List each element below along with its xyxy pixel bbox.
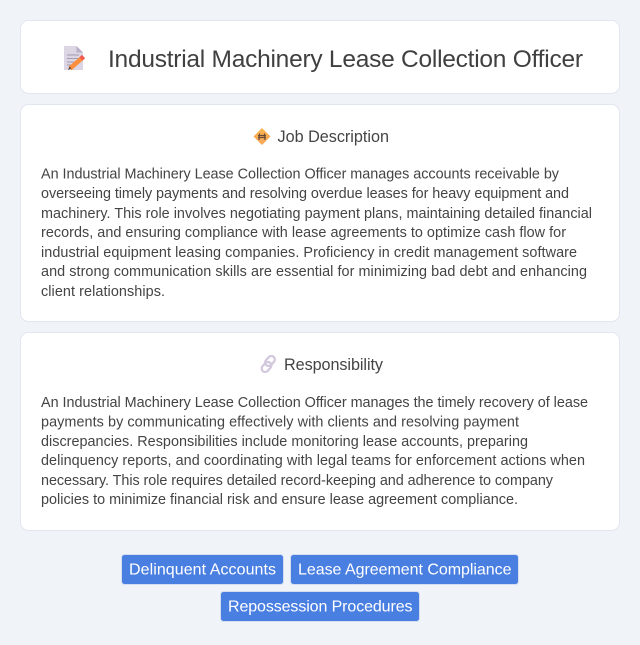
text block: job description: An Industrial Machinery Lease Collection Officer manages accounts receivable by [41, 166, 560, 182]
tag: repossession procedures [220, 592, 420, 622]
text block: responsibility [41, 395, 588, 508]
text block: job description: machinery. This role involves negotiating payment plans, maintaining detailed financial [41, 206, 592, 222]
panel: responsibility [20, 332, 620, 530]
title: Industrial Machinery Lease Collection Officer [108, 46, 583, 73]
tag: delinquent accounts: Delinquent Accounts [129, 562, 276, 578]
heading: responsibility: Responsibility [284, 356, 384, 374]
icon: document with pencil [64, 46, 84, 70]
panel: header [20, 20, 620, 94]
tag: delinquent accounts [122, 554, 284, 584]
tag: lease agreement compliance: Lease Agreement Compliance [298, 562, 512, 578]
text block: responsibility: necessary. This role requires detailed record-keeping and adherence to company [41, 473, 554, 489]
heading: job description: Job Description [278, 128, 389, 146]
text block: job description: client relationships. [41, 284, 165, 300]
text block: responsibility: policies to minimize financial risk and ensure lease agreement compliance. [41, 492, 518, 508]
text block: responsibility: payments by communicating effectively with clients and resolving payment [41, 414, 519, 430]
text block: job description: records, and ensuring compliance with lease agreements to optimize cash flow for [41, 225, 566, 241]
tag: repossession procedures: Repossession Procedures [228, 598, 412, 616]
text block: job description [41, 166, 592, 300]
panel: job description [20, 104, 620, 322]
icon: construction diamond [254, 128, 270, 145]
icon: chain link [260, 355, 276, 373]
text block: job description: industrial equipment leasing companies. Proficiency in credit management software [41, 245, 577, 261]
text block: responsibility: delinquency reports, and coordinating with legal teams for enforcement actions when [41, 453, 585, 469]
tag: lease agreement compliance [290, 554, 518, 584]
text block: responsibility: An Industrial Machinery Lease Collection Officer manages the timely recovery of lease [41, 395, 588, 411]
text block: job description: overseeing timely payments and resolving overdue leases for heavy equipment and [41, 186, 569, 202]
text block: job description: and strong communication skills are essential for minimizing bad debt and enhancing [41, 264, 587, 280]
text block: responsibility: discrepancies. Responsibilities include monitoring lease accounts, preparing [41, 434, 528, 450]
